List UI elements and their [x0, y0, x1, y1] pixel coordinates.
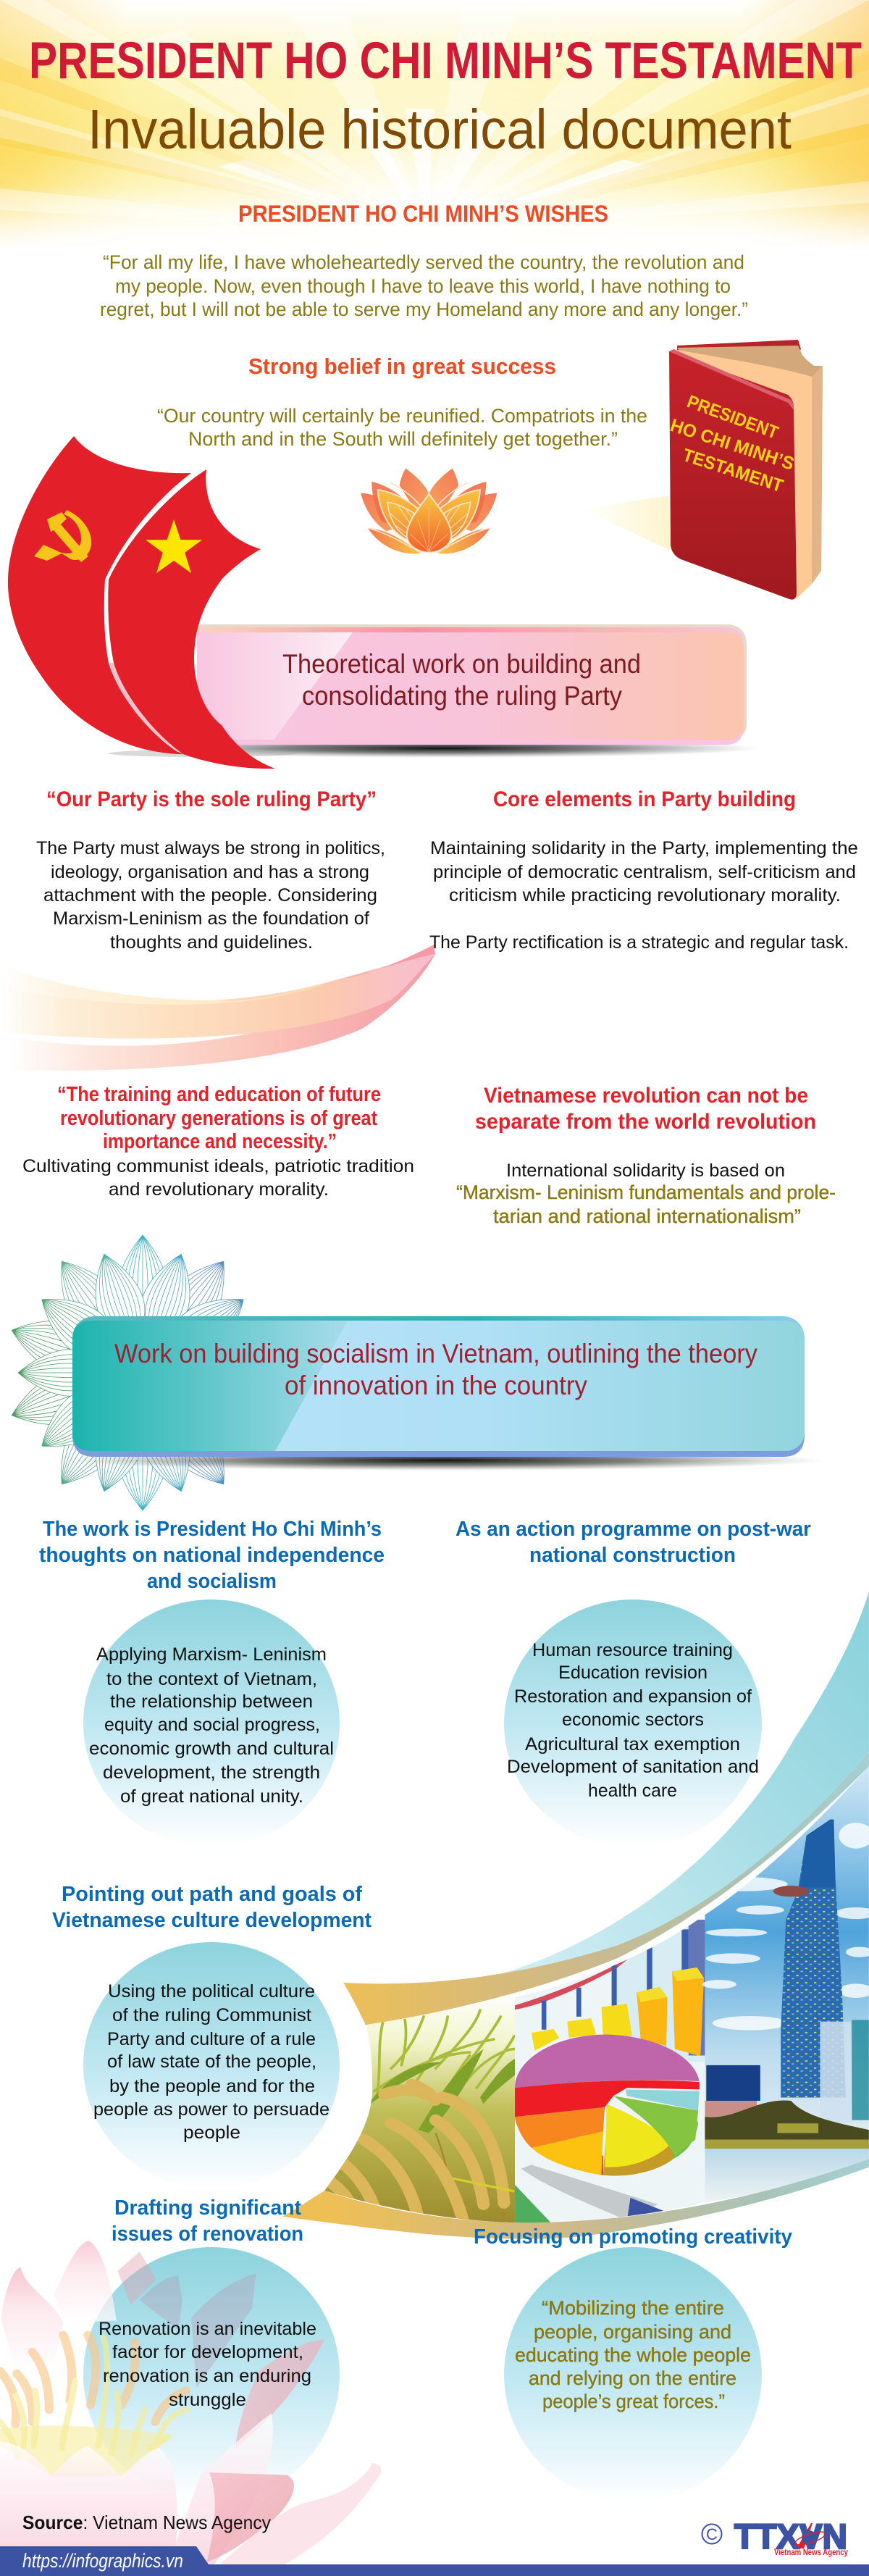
text block: action programme: national construction [529, 1544, 736, 1567]
text block: action programme: Restoration and expansion of [514, 1686, 752, 1707]
icon: lotus [361, 469, 497, 553]
heading: strong belief: Strong belief in great success [248, 354, 556, 379]
quote: wishes: my people. Now, even though I have to leave this world, I have nothing to [115, 275, 731, 297]
circle: drafting renovation [83, 2247, 340, 2502]
text block: national independence [39, 1518, 385, 1847]
text block: promoting creativity [474, 2225, 792, 2502]
text block: sole ruling party [36, 787, 385, 953]
photo: rice field [313, 1752, 869, 2227]
panel: banner theoretical work [125, 624, 762, 758]
text block: culture development [52, 1883, 371, 2188]
text block: national independence: Applying Marxism- Leninism [96, 1644, 327, 1665]
panel: banner theoretical work: Theoretical work on building and [282, 649, 641, 679]
text block: training and education [22, 1083, 414, 1200]
teal ribbon [487, 1592, 869, 1978]
quote: wishes: “For all my life, I have wholeheartedly served the country, the revolution and [103, 251, 744, 273]
gold upper band [343, 1752, 869, 2025]
text block: promoting creativity: educating the whole people [515, 2344, 751, 2366]
text block: renovation: factor for development, [112, 2342, 303, 2362]
text block: renovation: strunggle [169, 2390, 246, 2410]
decorative pink lotus flower [0, 2241, 382, 2564]
text block: national independence: economic growth and cultural [89, 1739, 334, 1759]
text block: action programme: economic sectors [562, 1710, 704, 1730]
text block: training and education: and revolutionary morality. [109, 1179, 329, 1200]
text block: action programme: Development of sanitation and [507, 1757, 759, 1777]
icon: book: HO CHI MINH’S [668, 415, 797, 474]
text block: culture development: by the people and for the [109, 2076, 315, 2096]
text block: core elements: principle of democratic centralism, self-criticism and [433, 862, 856, 882]
text block: world revolution: separate from the world revolution [475, 1110, 816, 1134]
footer url: https://infographics.vn [22, 2550, 183, 2572]
picture band: rice, chart and city [282, 1592, 869, 2239]
text block: promoting creativity: people’s great forces.” [542, 2391, 725, 2412]
panel: banner theoretical work: consolidating the ruling Party [302, 681, 622, 711]
logo: TTXVN: TTXVN [734, 2518, 847, 2556]
text block: core elements: Core elements in Party building [493, 787, 796, 811]
icon: outline lotus [4, 1235, 282, 1510]
text block: renovation: renovation is an enduring [103, 2366, 311, 2386]
decorative ribbon [0, 945, 435, 1071]
text block: core elements: Maintaining solidarity in the Party, implementing the [430, 838, 858, 858]
quote: reunification: “Our country will certainly be reunified. Compatriots in the [157, 405, 647, 427]
text block: action programme: Education revision [558, 1663, 708, 1683]
text block: national independence: development, the strength [103, 1762, 320, 1783]
panel: banner building socialism: Work on building socialism in Vietnam, outlining the theory [114, 1339, 757, 1368]
icon: party and national flags [8, 436, 297, 769]
text block: world revolution: International solidarity is based on [506, 1161, 785, 1181]
source note: Source: Vietnam News Agency [22, 2512, 271, 2533]
text block: national independence: and socialism [147, 1570, 277, 1593]
text block: national independence: The work is President Ho Chi Minh’s [43, 1518, 382, 1541]
text block: culture development: Pointing out path and goals of [62, 1883, 362, 1906]
text block: training and education: revolutionary generations is of great [60, 1107, 377, 1130]
panel: banner building socialism [58, 1316, 826, 1471]
quote: reunification [157, 405, 647, 450]
text block: promoting creativity: and relying on the entire [529, 2367, 736, 2389]
logo: TTXVN: C [706, 2525, 718, 2543]
text block: action programme: As an action programme on post-war [456, 1518, 811, 1541]
text block: action programme: Agricultural tax exemption [525, 1734, 740, 1755]
text block: promoting creativity: Focusing on promoting creativity [474, 2225, 792, 2249]
text block: core elements: The Party rectification is a strategic and regular task. [429, 932, 849, 953]
text block: core elements: criticism while practicing revolutionary morality. [449, 885, 841, 906]
photo: chart with pie [515, 1920, 705, 2227]
header background with sun rays [0, 0, 869, 250]
text block: promoting creativity: “Mobilizing the entire [542, 2297, 724, 2319]
quote: reunification: North and in the South will definitely get together.” [188, 428, 618, 450]
text block: national independence: to the context of Vietnam, [106, 1669, 317, 1689]
text block: world revolution: Vietnamese revolution can not be [484, 1084, 808, 1108]
text block: renovation: Renovation is an inevitable [98, 2319, 316, 2339]
icon: book: TESTAMENT [680, 445, 786, 496]
text block: national independence: of great national unity. [120, 1786, 303, 1807]
text block: promoting creativity: people, organising and [534, 2321, 731, 2343]
text block: culture development: of law state of the people, [107, 2052, 316, 2072]
text block: world revolution [456, 1084, 836, 1227]
icon: book [582, 340, 823, 600]
icon: star [146, 519, 202, 573]
text block: national independence: thoughts on national independence [39, 1544, 385, 1567]
text block: action programme: health care [588, 1781, 677, 1801]
text block: sole ruling party: The Party must always be strong in politics, [36, 838, 385, 858]
text block: culture development: people as power to persuade [93, 2099, 329, 2120]
text block: culture development: Party and culture of a rule [107, 2029, 316, 2049]
text block: action programme [456, 1518, 811, 1847]
text block: training and education: “The training and education of future [57, 1083, 381, 1106]
text block: renovation: Drafting significant [114, 2196, 301, 2220]
logo: TTXVN: Vietnam News Agency [774, 2547, 848, 2557]
icon: hammer and sickle [34, 510, 91, 562]
text block: action programme: Human resource training [532, 1640, 733, 1660]
heading: wishes: PRESIDENT HO CHI MINH’S WISHES [238, 201, 608, 227]
text block: core elements [429, 787, 858, 953]
text block: national independence: equity and social progress, [104, 1715, 320, 1735]
footer bar [0, 2546, 869, 2576]
text block: national independence: the relationship between [110, 1691, 313, 1712]
text block: sole ruling party: attachment with the people. Considering [43, 885, 377, 906]
text block: culture development: Vietnamese culture development [52, 1909, 371, 1932]
gold lower band [282, 2159, 869, 2239]
text block: world revolution: tarian and rational internationalism” [493, 1205, 801, 1227]
icon: book: PRESIDENT [684, 391, 781, 443]
text block: sole ruling party: Marxism-Leninism as the foundation of [53, 908, 369, 929]
subtitle: Invaluable historical document [88, 99, 792, 161]
quote: wishes [100, 251, 748, 320]
text block: renovation [98, 2196, 316, 2410]
text block: training and education: importance and necessity.” [103, 1130, 337, 1153]
text block: renovation: issues of renovation [112, 2222, 303, 2246]
text block: sole ruling party: thoughts and guidelines. [110, 932, 313, 953]
photo: Ho Chi Minh City skyline [699, 1752, 869, 2204]
text block: training and education: Cultivating communist ideals, patriotic tradition [22, 1156, 414, 1176]
quote: wishes: regret, but I will not be able to serve my Homeland any more and any longer.” [100, 298, 748, 320]
text block: culture development: of the ruling Communist [112, 2005, 311, 2025]
text block: sole ruling party: ideology, organisation and has a strong [51, 862, 369, 882]
text block: sole ruling party: “Our Party is the sole ruling Party” [46, 787, 377, 811]
panel: banner building socialism: of innovation in the country [285, 1371, 587, 1400]
text block: world revolution: “Marxism- Leninism fundamentals and prole- [456, 1182, 836, 1203]
text block: culture development: people [183, 2123, 240, 2143]
text block: culture development: Using the political culture [108, 1981, 315, 2002]
